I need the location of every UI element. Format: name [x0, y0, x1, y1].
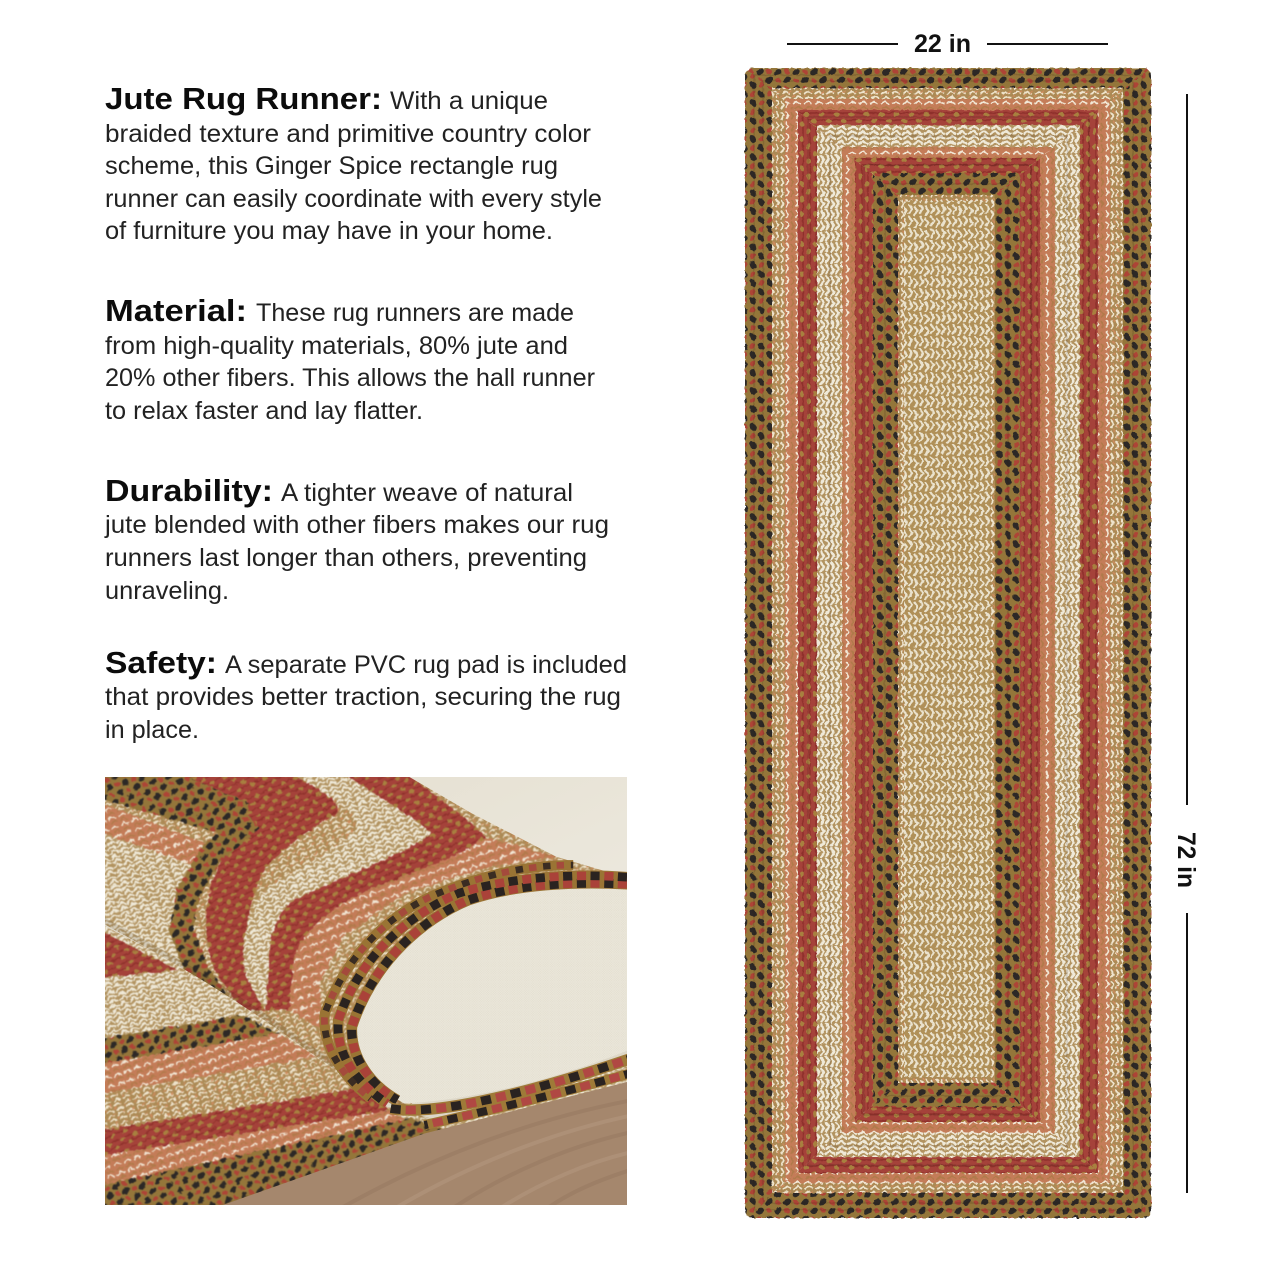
paragraph: Safety description: A separate PVC rug pad is included	[225, 651, 627, 679]
upper left stripes	[105, 833, 192, 969]
heading: Durability: Durability:	[105, 473, 273, 508]
heading: Material: Material:	[105, 293, 247, 328]
paragraph: Durability description	[104, 479, 609, 605]
backing pad underside	[354, 887, 641, 1104]
rolled rug section	[105, 777, 604, 1120]
paragraph: Durability description: runners last longer than others, preventing	[105, 544, 587, 572]
text block: Durability	[104, 473, 609, 605]
paragraph: Jute Rug Runner description: With a unique	[390, 87, 548, 115]
paragraph: Durability description: A tighter weave of natural	[281, 479, 573, 507]
width dimension: 22 in: 22 in	[914, 30, 971, 58]
rug runner top view	[745, 68, 1151, 1218]
flat rug section	[105, 926, 627, 1205]
rolled edge braid	[324, 865, 641, 1104]
background pad	[410, 777, 627, 872]
paragraph: Jute Rug Runner description: of furniture you may have in your home.	[105, 217, 553, 245]
paragraph: Safety description	[105, 651, 627, 744]
orange tan band	[289, 837, 556, 1030]
paragraph: Jute Rug Runner description	[105, 87, 602, 245]
text block: Safety	[105, 645, 627, 744]
paragraph: Material description: 20% other fibers. This allows the hall runner	[105, 364, 595, 392]
paragraph: Safety description: that provides better traction, securing the rug	[105, 683, 621, 711]
text block: Material	[105, 293, 595, 425]
contact shadow	[100, 922, 431, 1120]
paragraph: Jute Rug Runner description: braided texture and primitive country color	[105, 120, 591, 148]
first red band	[188, 777, 338, 1012]
paragraph: Durability description: jute blended with other fibers makes our rug	[104, 511, 609, 539]
photo: rolled rug showing PVC pad underside	[105, 777, 627, 1205]
heading: Jute Rug Runner: Jute Rug Runner:	[105, 81, 382, 116]
text block: Jute Rug Runner	[105, 81, 602, 245]
paragraph: Material description: These rug runners are made	[256, 299, 574, 327]
heading: Safety: Safety:	[105, 645, 217, 680]
paragraph: Durability description: unraveling.	[105, 577, 229, 605]
white band	[243, 763, 431, 1010]
lower edge braid	[391, 1055, 641, 1125]
paragraph: Material description: from high-quality materials, 80% jute and	[105, 332, 568, 360]
infographic canvas	[104, 34, 1196, 1219]
paragraph: Material description: to relax faster and lay flatter.	[105, 397, 423, 425]
wooden floor	[223, 1082, 627, 1205]
paragraph: Safety description: in place.	[105, 716, 199, 744]
paragraph: Jute Rug Runner description: runner can easily coordinate with every style	[105, 185, 602, 213]
paragraph: Jute Rug Runner description: scheme, this Ginger Spice rectangle rug	[105, 152, 558, 180]
second red band	[266, 763, 485, 1010]
paragraph: Material description	[105, 299, 595, 425]
length dimension: 72 in: 72 in	[1172, 832, 1200, 888]
